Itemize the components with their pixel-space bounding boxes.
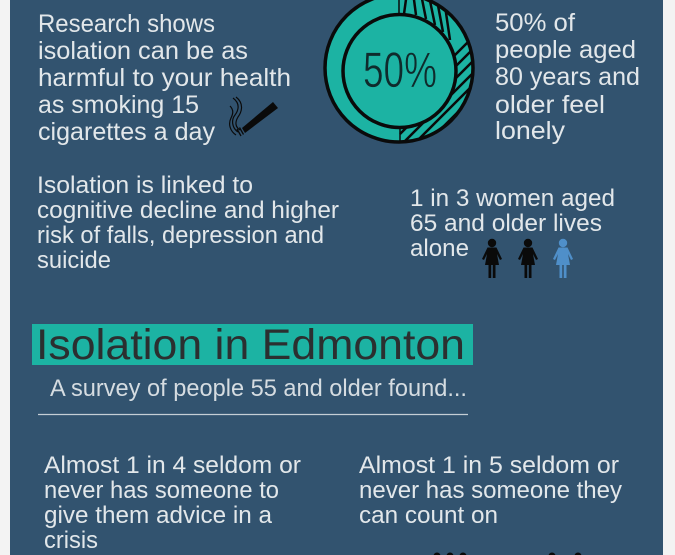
text block: 1 in 4: crisis [44,527,98,554]
icon: people heads cropped at bottom [434,552,582,555]
text block: cognitive decline: Isolation is linked to [37,172,253,199]
text block: cognitive decline: risk of falls, depression and [37,222,324,249]
subheading: survey: A survey of people 55 and older found... [50,375,467,402]
text block: 50% lonely: people aged [495,36,636,64]
text block: cognitive decline: suicide [37,247,111,274]
text block: isolation harm: Research shows [38,10,215,38]
text block: 50% lonely: lonely [495,117,566,145]
text block: 1 in 5: can count on [359,502,498,529]
text block: isolation harm: cigarettes a day [38,118,215,146]
text block: 50% lonely: older feel [495,91,605,119]
text block: women alone [410,185,615,262]
icon: woman 1 [482,239,502,278]
text block: isolation harm: as smoking 15 [38,91,199,119]
text block: 1 in 5: never has someone they [359,477,622,504]
ring outlines [325,0,473,142]
text block: women alone: alone [410,235,469,262]
text block: 1 in 5: Almost 1 in 5 seldom or [359,452,619,479]
text block: 50% lonely [495,9,640,145]
icon: woman 2 [518,239,538,278]
label: 50%: 50% [363,42,437,98]
text block: isolation harm: harmful to your health [38,64,291,92]
icon: woman 3 highlighted [553,239,573,278]
text block: women alone: 65 and older lives [410,210,602,237]
text block: cognitive decline: cognitive decline and higher [37,197,339,224]
text block: isolation harm: isolation can be as [38,37,248,65]
hatch: right half of ring [399,0,472,140]
text block: 50% lonely: 80 years and [495,63,640,91]
text block: 1 in 4 [44,452,301,554]
text block: 1 in 4: never has someone to [44,477,279,504]
text block: 50% lonely: 50% of [495,9,575,37]
icon: cigarette [230,97,278,136]
text block: 1 in 4: give them advice in a [44,502,273,529]
text block: women alone: 1 in 3 women aged [410,185,615,212]
chart: 50% donut [323,0,475,144]
heading: Isolation in Edmonton: Isolation in Edmonton [36,321,465,369]
text block: 1 in 5 [359,452,622,529]
text block: isolation harm [38,10,291,146]
text block: 1 in 4: Almost 1 in 4 seldom or [44,452,301,479]
text block: cognitive decline [37,172,339,274]
